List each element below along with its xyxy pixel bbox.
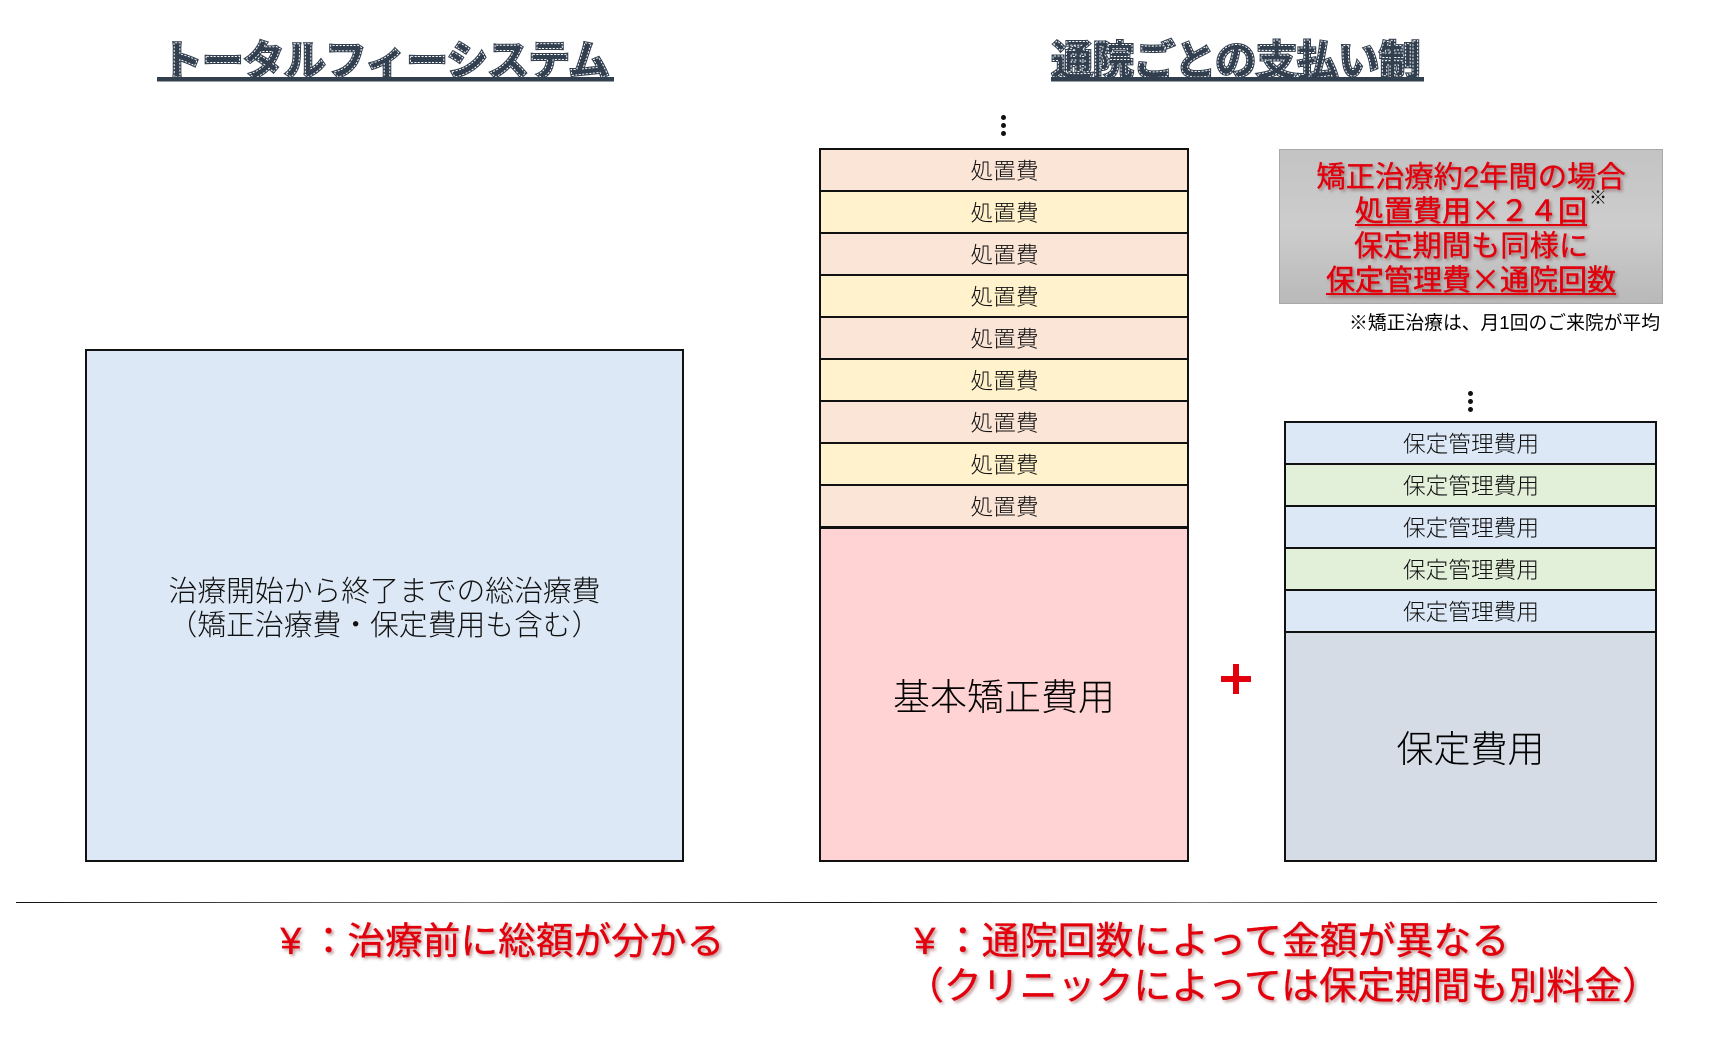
text: footnote: ※矯正治療は、月1回のご来院が平均 xyxy=(1349,312,1660,333)
title: pay per visit: 通院ごとの支払い制 xyxy=(1052,38,1420,84)
divider xyxy=(16,902,1657,903)
icon: ellipsis above treatment rows xyxy=(1001,115,1006,136)
row: retention management fee 1 xyxy=(1284,589,1657,633)
row: treatment fee 7 xyxy=(819,232,1189,276)
text: total fee conclusion: ¥ xyxy=(280,920,301,962)
row: treatment fee 2: 処置費 xyxy=(970,452,1039,478)
row: treatment fee 4 xyxy=(819,358,1189,402)
row: treatment fee 8 xyxy=(819,190,1189,234)
text: pay per visit conclusion: ：通院回数によって金額が異なる xyxy=(944,921,1509,963)
panel: basic orthodontic fee xyxy=(819,527,1189,862)
panel: retention fee: 保定費用 xyxy=(1396,729,1544,770)
title: pay per visit: 通院ごとの支払い制 xyxy=(1052,38,1420,84)
row: retention management fee 2 xyxy=(1284,547,1657,591)
row: treatment fee 8: 処置費 xyxy=(970,200,1039,226)
row: treatment fee 5: 処置費 xyxy=(970,326,1039,352)
row: treatment fee 9: 処置費 xyxy=(970,158,1039,184)
row: retention management fee 4 xyxy=(1284,463,1657,507)
row: treatment fee 3: 処置費 xyxy=(970,410,1039,436)
text: callout line 3: 保定期間も同様に xyxy=(1354,230,1588,263)
row: retention management fee 5 xyxy=(1284,421,1657,465)
row: treatment fee 6: 処置費 xyxy=(970,284,1039,310)
row: treatment fee 3 xyxy=(819,400,1189,444)
row: retention management fee 4: 保定管理費用 xyxy=(1403,472,1539,498)
callout: number of visits note xyxy=(1279,149,1663,304)
text: reference mark: ※ xyxy=(1589,188,1607,208)
stack: retention management rows xyxy=(1284,421,1657,862)
text: pay per visit conclusion xyxy=(906,921,1660,1008)
text: callout line 4: 保定管理費×通院回数 xyxy=(1326,257,1616,299)
panel: basic orthodontic fee: 基本矯正費用 xyxy=(893,676,1115,718)
row: retention management fee 2: 保定管理費用 xyxy=(1403,556,1539,582)
title: total fee system: トータルフィーシステム xyxy=(161,38,610,84)
text: total fee description: （矯正治療費・保定費用も含む） xyxy=(169,610,600,642)
text: pay per visit conclusion: ¥ xyxy=(914,921,935,963)
stack: treatment fee rows xyxy=(819,148,1189,862)
panel: retention fee xyxy=(1284,631,1657,862)
icon: plus sign xyxy=(1221,664,1251,694)
row: treatment fee 9 xyxy=(819,148,1189,192)
text: pay per visit conclusion: （クリニックによっては保定期間も別料金） xyxy=(906,966,1660,1008)
row: treatment fee 1 xyxy=(819,484,1189,528)
text: total fee conclusion: ：治療前に総額が分かる xyxy=(310,920,724,962)
row: treatment fee 6 xyxy=(819,274,1189,318)
icon: ellipsis above retention rows xyxy=(1468,391,1473,412)
panel: total fee xyxy=(85,349,684,862)
text: callout line 1: 矯正治療約2年間の場合 xyxy=(1316,161,1626,194)
row: retention management fee 1: 保定管理費用 xyxy=(1403,598,1539,624)
title: total fee system: トータルフィーシステム xyxy=(161,38,610,84)
row: treatment fee 7: 処置費 xyxy=(970,242,1039,268)
row: treatment fee 5 xyxy=(819,316,1189,360)
row: retention management fee 3 xyxy=(1284,505,1657,549)
row: treatment fee 1: 処置費 xyxy=(970,494,1039,520)
text: total fee description: 治療開始から終了までの総治療費 xyxy=(169,576,600,608)
text: total fee description xyxy=(169,576,600,642)
row: retention management fee 3: 保定管理費用 xyxy=(1403,514,1539,540)
row: retention management fee 5: 保定管理費用 xyxy=(1403,430,1539,456)
row: treatment fee 4: 処置費 xyxy=(970,368,1039,394)
text: callout line 2: 処置費用×２４回 xyxy=(1355,188,1587,230)
row: treatment fee 2 xyxy=(819,442,1189,486)
